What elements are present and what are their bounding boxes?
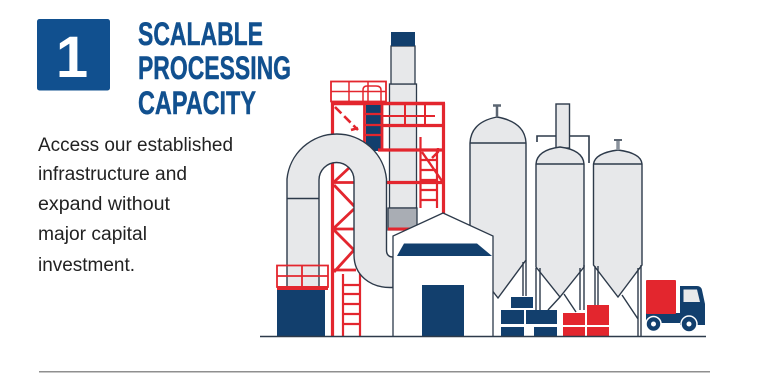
silo: middle with pipe — [536, 104, 589, 312]
body text: infrastructure and — [38, 164, 187, 185]
body text: expand without — [38, 194, 171, 215]
curved pipe — [287, 134, 393, 288]
building — [393, 213, 493, 336]
silo: large — [470, 106, 526, 298]
lower-left navy tank with railing — [277, 266, 328, 336]
heading: CAPACITY — [138, 85, 256, 121]
pipe band — [287, 198, 319, 200]
body text: major capital — [38, 224, 147, 245]
chimney — [388, 32, 417, 230]
body text — [38, 135, 233, 276]
red crates — [563, 305, 609, 336]
body text: investment. — [38, 255, 135, 276]
heading — [138, 16, 291, 121]
red scaffolding — [331, 82, 445, 336]
illustration: processing plant — [260, 32, 706, 336]
heading: SCALABLE — [138, 16, 263, 52]
body text: Access our established — [38, 135, 233, 156]
navy crates — [501, 297, 557, 336]
delivery truck — [646, 280, 705, 332]
number badge — [37, 19, 110, 90]
bottom divider — [39, 371, 710, 372]
silo: right — [594, 140, 642, 336]
number badge: 1 — [56, 25, 88, 90]
ground line — [260, 336, 706, 338]
heading: PROCESSING — [138, 50, 291, 86]
